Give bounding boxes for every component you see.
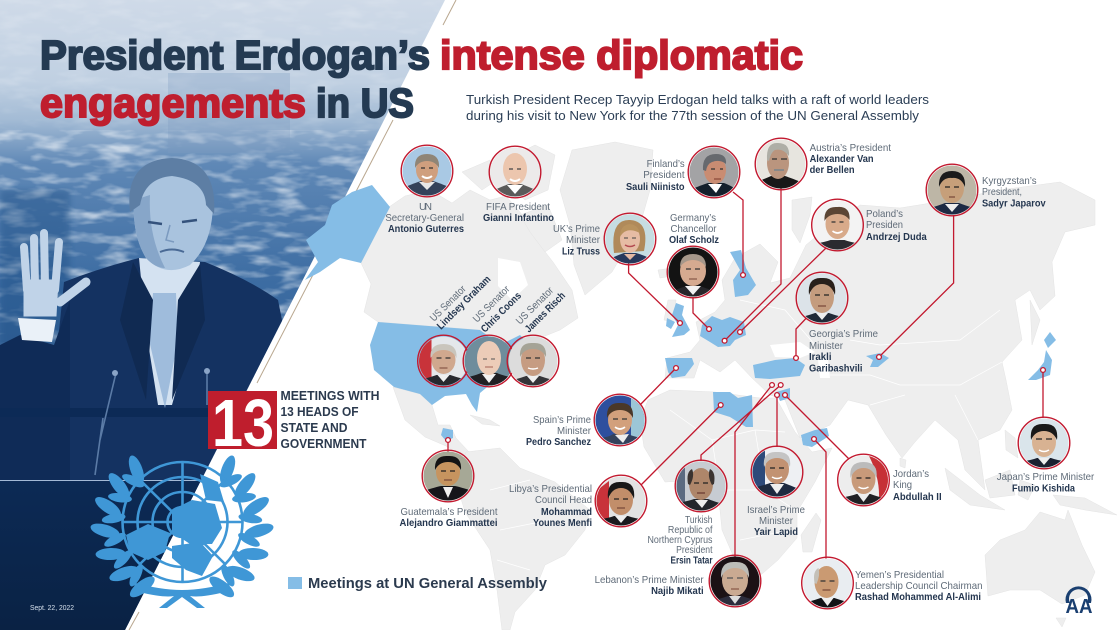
label: Van der Bellen: Alexander Van <box>810 154 874 165</box>
label: Lapid: Minister <box>759 516 794 527</box>
badge: number 13: 13 <box>212 386 274 461</box>
portrait: Al-Alimi <box>802 557 853 609</box>
label: Japarov: Sadyr Japarov <box>982 198 1046 210</box>
photo: raised hand <box>24 233 86 316</box>
map: highlighted Spain <box>665 358 694 378</box>
leader: Coons <box>463 284 524 387</box>
label: Guterres: Antonio Guterres <box>388 224 464 235</box>
map: Eurasia <box>665 182 1095 490</box>
label: Al-Alimi: Leadership Council Chairman <box>855 581 983 592</box>
label: Tatar: Republic of <box>668 525 713 536</box>
portrait: Infantino <box>489 146 541 198</box>
label: Japarov: President, <box>982 187 1022 198</box>
AA logo <box>1066 586 1092 618</box>
portrait: Truss <box>604 213 656 265</box>
map: Greenland <box>560 142 653 295</box>
label: Tatar: Ersin Tatar <box>670 556 712 566</box>
title: President Erdogan’s <box>40 32 430 78</box>
leader: Tatar <box>648 460 727 566</box>
portrait: Coons <box>463 335 515 387</box>
label: Van der Bellen <box>810 143 891 176</box>
label: Graham: Lindsey Graham <box>435 274 493 332</box>
map: highlighted Germany Austria Poland <box>700 316 746 347</box>
label: Niinisto <box>626 159 685 193</box>
label: Duda: Presiden <box>866 220 903 231</box>
date: Sept. 22, 2022 <box>30 603 74 612</box>
label: Kishida: Fumio Kishida <box>1012 484 1075 494</box>
badge text: MEETINGS WITH <box>280 389 380 403</box>
badge text: GOVERNMENT <box>280 437 367 451</box>
label: Lapid <box>747 505 805 538</box>
label: Van der Bellen: der Bellen <box>810 165 855 176</box>
label: Garibashvili <box>809 329 878 374</box>
label: Coons: US Senator <box>471 284 513 325</box>
label: Abdullah: Jordan’s <box>893 469 929 480</box>
label: Kishida: Japan’s Prime Minister <box>997 472 1095 483</box>
map: Australia <box>985 510 1095 627</box>
label: Truss: UK’s Prime <box>553 224 600 235</box>
leader: Infantino <box>483 146 554 224</box>
leader: Mikati <box>595 555 761 607</box>
map: highlighted Finland <box>730 250 756 297</box>
leader: Niinisto <box>626 146 740 198</box>
portrait: Abdullah <box>838 454 889 506</box>
map: highlighted Kyrgyzstan <box>866 353 889 367</box>
leader: Japarov <box>926 164 1046 216</box>
portrait: Japarov <box>926 164 978 216</box>
world map <box>305 142 1117 630</box>
label: Menfi: Younes Menfi <box>533 518 592 529</box>
label: Menfi: Mohammad <box>541 507 592 518</box>
label: Truss <box>553 224 601 258</box>
map: Canada and northern islands <box>361 190 578 345</box>
leader: Scholz <box>667 213 719 298</box>
label: Infantino: Gianni Infantino <box>483 213 554 224</box>
portrait: Mikati <box>709 555 761 607</box>
label: Menfi: Council Head <box>535 495 592 506</box>
label: Infantino <box>483 202 554 224</box>
map: Mexico and Central America <box>393 387 470 456</box>
label: Giammattei: Alejandro Giammattei <box>400 518 498 529</box>
label: Garibashvili: Garibashvili <box>809 364 863 374</box>
label: Garibashvili: Minister <box>809 341 844 352</box>
label: Japarov: Kyrgyzstan’s <box>982 176 1037 187</box>
label: Coons: Chris Coons <box>479 290 524 335</box>
leader: Guterres <box>385 145 464 235</box>
leader: Duda <box>812 199 927 251</box>
leader: Van der Bellen <box>755 138 891 190</box>
portrait: Niinisto <box>688 146 740 198</box>
map: highlighted Libya <box>713 392 753 427</box>
leader: Giammattei <box>400 450 498 529</box>
label: Niinisto: President <box>643 170 685 181</box>
label: Mikati: Lebanon’s Prime Minister <box>595 575 704 586</box>
label: Scholz: Olaf Scholz <box>669 235 719 246</box>
badge text: STATE AND <box>280 421 348 435</box>
map: Africa and Madagascar <box>640 390 832 578</box>
label: Abdullah: Abdullah II <box>893 492 942 503</box>
subtitle <box>466 93 929 123</box>
subtitle: Turkish President Recep Tayyip Erdogan held talks with a raft of world leaders <box>466 93 929 107</box>
label: Tatar: Northern Cyprus <box>648 535 712 546</box>
portrait: Sanchez <box>594 394 646 446</box>
title: in US <box>316 80 414 126</box>
label: Sanchez: Spain’s Prime <box>533 415 591 426</box>
map: South America <box>456 448 590 630</box>
portrait: Graham <box>418 335 469 387</box>
leader lines and map dots <box>446 188 1045 559</box>
portrait: Tatar <box>675 460 727 512</box>
map: highlighted Alaska <box>305 185 390 280</box>
portrait: Duda <box>812 199 863 251</box>
portrait: Scholz <box>667 246 719 298</box>
label: Guterres <box>385 202 464 235</box>
leader: Graham <box>418 274 493 387</box>
badge text <box>280 389 380 451</box>
label: Graham: US Senator <box>428 283 469 324</box>
portrait: Kishida <box>1018 417 1070 469</box>
label: Giammattei <box>400 507 498 529</box>
portrait: Guterres <box>401 145 453 197</box>
map: highlighted Turkey <box>753 358 805 379</box>
label: Risch: US Senator <box>514 285 556 327</box>
emblem: laurel wreath <box>89 454 275 608</box>
leader: Sanchez <box>526 394 646 448</box>
label: Japarov <box>982 176 1046 210</box>
background photo panel <box>0 0 450 630</box>
AA logo: AA <box>1066 596 1092 618</box>
label: Scholz: Germany’s <box>670 213 716 224</box>
label: Infantino: FIFA President <box>486 202 550 213</box>
portrait: Risch <box>507 335 559 387</box>
label: Truss: Liz Truss <box>562 246 600 258</box>
label: Al-Alimi: Yemen’s Presidential <box>855 570 944 581</box>
title <box>40 32 803 126</box>
portrait: Giammattei <box>422 450 474 502</box>
label: Guterres: UN <box>419 202 432 213</box>
map: highlighted UK <box>666 303 690 337</box>
label: Duda: Andrzej Duda <box>866 232 927 243</box>
label: Sanchez: Minister <box>557 426 592 437</box>
subtitle: during his visit to New York for the 77th session of the UN General Assembly <box>466 109 920 123</box>
label: Tatar: Turkish <box>685 515 713 526</box>
legend: Meetings at UN General Assembly <box>308 576 547 592</box>
label: Garibashvili: Irakli <box>809 352 832 363</box>
label: Abdullah <box>893 469 942 503</box>
label: Scholz: Chancellor <box>670 224 717 235</box>
map: highlighted Guatemala <box>441 428 453 441</box>
leader: Kishida <box>997 417 1095 494</box>
leader: Menfi <box>509 475 647 529</box>
portrait: Van der Bellen <box>755 138 807 190</box>
label: Truss: Minister <box>566 235 601 246</box>
label: Abdullah: King <box>893 480 912 491</box>
label: Niinisto: Sauli Niinisto <box>626 182 685 193</box>
label: Sanchez <box>526 415 592 448</box>
label: Guterres: Secretary-General <box>385 213 464 224</box>
label: Tatar: President <box>676 545 713 556</box>
map: highlighted Japan <box>1028 332 1056 380</box>
label: Sanchez: Pedro Sanchez <box>526 437 591 448</box>
label: Niinisto: Finland’s <box>647 159 685 170</box>
label: Al-Alimi: Rashad Mohammed Al-Alimi <box>855 592 981 603</box>
label: Kishida <box>997 472 1095 494</box>
label: Garibashvili: Georgia’s Prime <box>809 329 878 340</box>
label: Risch: James Risch <box>523 291 568 335</box>
label: Risch <box>514 285 568 335</box>
title: intense diplomatic <box>440 32 803 78</box>
decorative tan line segments <box>129 0 456 630</box>
portrait: Menfi <box>595 475 647 527</box>
badge text: 13 HEADS OF <box>280 405 359 419</box>
label: Menfi: Libya’s Presidential <box>509 484 592 495</box>
label: Menfi <box>509 484 592 529</box>
leader: Lapid <box>747 446 805 538</box>
label: Mikati: Najib Mikati <box>651 586 704 597</box>
label: Scholz <box>669 213 719 246</box>
leader: Risch <box>507 285 568 387</box>
emblem: globe grid <box>122 462 242 582</box>
label: Van der Bellen: Austria’s President <box>810 143 891 154</box>
photo: podium and lower desk <box>0 449 217 630</box>
emblem: continents <box>126 474 224 576</box>
map: highlighted Cyprus Lebanon Israel Jordan <box>776 388 790 401</box>
leader: Al-Alimi <box>802 557 983 609</box>
label: Al-Alimi <box>855 570 983 603</box>
label: Giammattei: Guatemala’s President <box>400 507 498 518</box>
leader: Abdullah <box>838 454 942 506</box>
label: Duda <box>866 209 927 243</box>
label: Mikati <box>595 575 704 597</box>
map: Southeast Asia and Oceania <box>945 430 1117 515</box>
label: Tatar <box>648 515 713 566</box>
label: Lapid: Israel’s Prime <box>747 505 805 516</box>
portrait: Lapid <box>751 446 803 498</box>
leader: Garibashvili <box>796 272 878 374</box>
leader: Truss <box>553 213 656 265</box>
label: Lapid: Yair Lapid <box>754 527 798 538</box>
label: Duda: Poland’s <box>866 209 903 220</box>
stat badge: 13 meetings <box>208 386 380 461</box>
map: highlighted USA <box>370 322 530 412</box>
UN emblem <box>89 454 275 608</box>
photo: Erdogan figure <box>0 158 300 480</box>
map: highlighted Yemen <box>801 428 829 447</box>
portrait: Garibashvili <box>796 272 848 324</box>
title: engagements <box>40 80 306 126</box>
